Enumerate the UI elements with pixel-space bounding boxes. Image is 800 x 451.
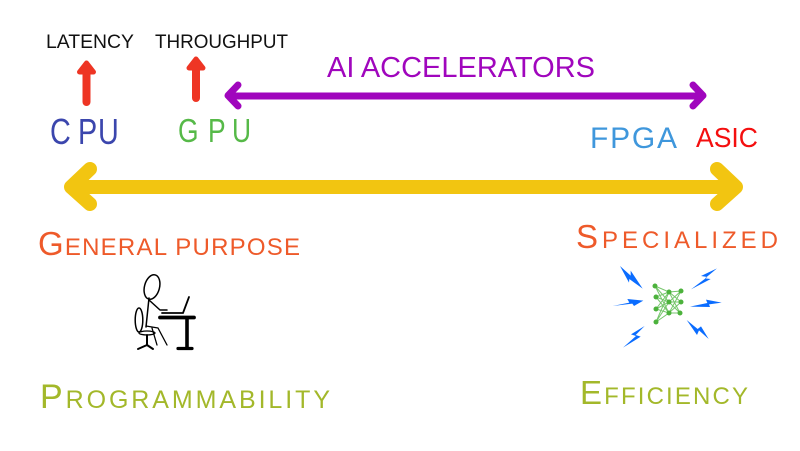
arrow: latency up [80,63,94,102]
label: latency: LATENCY [46,32,134,53]
arrow: throughput up [189,59,203,98]
label: programmability: PROGRAMMABILITY [40,378,330,416]
arrow: AI accelerators range [228,85,703,106]
heading: AI accelerators: AI ACCELERATORS [327,52,595,84]
label: efficiency: EFFICIENCY [580,374,748,411]
label: general purpose: GENERAL PURPOSE [38,225,300,262]
icon: person at laptop [135,273,194,349]
label: throughput: THROUGHPUT [155,32,288,53]
label: ASIC: ASIC [696,122,758,153]
arrow: general purpose to specialized spectrum [71,169,736,204]
icon: lightning bolts [613,266,722,348]
label: specialized: SPECIALIZED [576,218,778,255]
label: FPGA: FPGA [590,122,677,155]
icon: neural network [652,284,684,324]
icon: neural network with lightning bolts [613,266,722,348]
label: GPU: GPU [178,113,251,150]
label: CPU: CPU [50,111,119,152]
